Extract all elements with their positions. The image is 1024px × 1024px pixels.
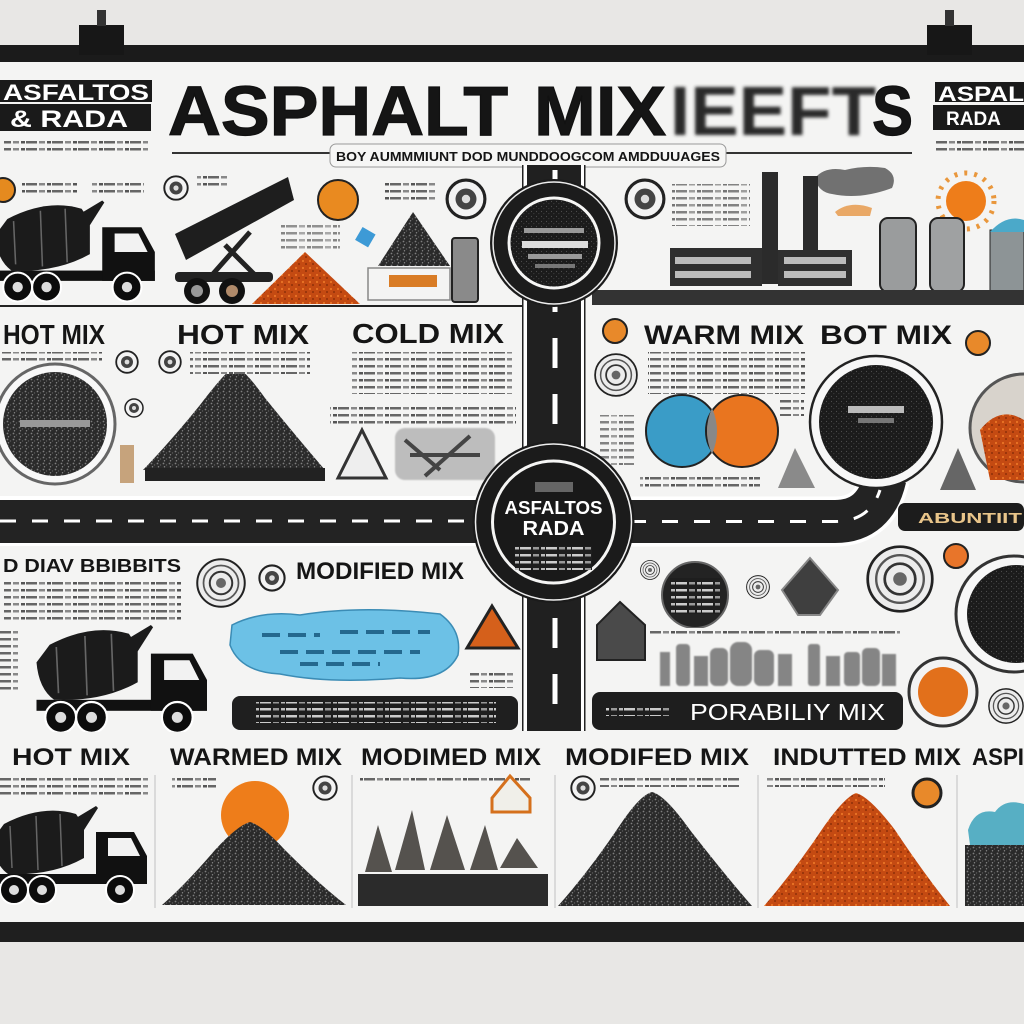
- top scene: factory: [670, 167, 1024, 292]
- orange edge badge: [0, 178, 15, 202]
- small badge: [989, 689, 1023, 723]
- panel: right infographics: [592, 544, 1024, 730]
- central junction: logo: [472, 441, 634, 603]
- logo left: & RADA: [10, 106, 128, 133]
- blue water shape: [230, 610, 459, 680]
- truck: [36, 625, 207, 733]
- plant box: [368, 268, 450, 300]
- orange disc: [706, 395, 778, 467]
- small figure: [120, 445, 134, 483]
- heading: MODIMED MIX: [361, 744, 541, 771]
- heading: INDUTTED MIX: [773, 744, 961, 771]
- disc: [0, 364, 115, 484]
- text block: [4, 580, 182, 620]
- truck: [0, 806, 147, 904]
- logo left: ASFALTOS: [3, 80, 149, 105]
- plant buildings: [670, 248, 852, 286]
- heading: WARMED MIX: [170, 744, 342, 771]
- small icon: [640, 560, 660, 580]
- heading: warm mix: WARM MIX: [644, 320, 804, 350]
- dark pile with sun: [162, 822, 346, 905]
- blue disc: [646, 395, 718, 467]
- small text rows under logos: [4, 139, 1024, 153]
- subtitle: BOY AUMMMIUNT DOD MUNDDOOGCOM AMDDUUAGES: [336, 150, 720, 164]
- logo right: ASPAL: [938, 83, 1024, 106]
- heading: HOT MIX: [12, 744, 130, 771]
- logo right: [933, 82, 1024, 130]
- heading: hot mix: HOT MIX: [3, 319, 105, 350]
- pile base: [145, 468, 325, 481]
- small badges: [116, 351, 181, 417]
- text bar: [232, 696, 518, 730]
- heading: hot mix 2: HOT MIX: [177, 319, 309, 350]
- icon: cement truck: [0, 200, 155, 302]
- label: abuntiit pill: ABUNTIIT: [918, 510, 1022, 527]
- text fragments: [22, 172, 435, 250]
- silos: [880, 218, 1024, 292]
- right machine: [965, 802, 1024, 906]
- sketch icons: [338, 428, 495, 480]
- icon: orange badge right: [966, 331, 990, 355]
- text fragment: [470, 670, 514, 688]
- small figures: [778, 448, 815, 488]
- black disc: [810, 356, 942, 488]
- small ring: [747, 576, 769, 598]
- horizontal road left: [0, 496, 480, 546]
- title word: mix: MIX: [534, 72, 666, 150]
- badge small: [259, 565, 285, 591]
- bottom rail: [0, 922, 1024, 942]
- dark pile: [558, 792, 752, 906]
- text rows: [0, 777, 885, 795]
- panel: daily benefits: [0, 556, 518, 733]
- warning: [467, 606, 518, 648]
- badge: [595, 354, 637, 396]
- text fragments: [600, 400, 804, 488]
- black disc: [662, 562, 728, 628]
- text fragment: [0, 630, 18, 690]
- blue diamond: [355, 227, 376, 247]
- chimneys: [762, 172, 818, 284]
- text fragments: [672, 184, 750, 226]
- top rail and hangers: [0, 10, 1024, 62]
- orange pile: [764, 793, 950, 906]
- central junction: logo: ASFALTOS: [504, 498, 602, 518]
- badge: [197, 559, 245, 607]
- text block: [190, 352, 310, 374]
- diamond: [782, 558, 838, 615]
- figures group: [358, 810, 548, 906]
- text block: [648, 352, 806, 394]
- sun: [221, 781, 289, 849]
- overlap: [707, 408, 717, 454]
- orange medallion: [909, 658, 977, 726]
- heading: D DIAV BBIBBITS: [3, 556, 181, 576]
- panel: warm mix: [595, 319, 1024, 490]
- title word: blurred middle: IEEFT: [670, 72, 876, 150]
- orange pile: [252, 252, 360, 304]
- skyline: [660, 642, 896, 686]
- label: abuntiit pill: [898, 503, 1024, 531]
- panel dividers: [155, 775, 957, 908]
- badge orange: [913, 779, 941, 807]
- heading: MODIFED MIX: [565, 744, 749, 771]
- curved road right: [630, 478, 885, 522]
- ring badge: [868, 547, 932, 611]
- icon: orange house: [492, 776, 530, 812]
- logo right: RADA: [946, 109, 1001, 130]
- tower: [452, 238, 478, 302]
- orange medallion: [318, 180, 358, 220]
- small orange: [944, 544, 968, 568]
- road segment under factory: [592, 290, 1024, 305]
- dark pile: [378, 212, 450, 266]
- icon: tipper trailer: [175, 177, 294, 304]
- top scene: trucks and piles: [0, 172, 664, 304]
- bottom band: [0, 732, 1024, 922]
- icon: house shield: [597, 602, 645, 660]
- pill: porability mix: PORABILIY MIX: [690, 699, 885, 725]
- vertical road: [522, 165, 586, 731]
- title word: final letter: S: [872, 72, 913, 150]
- mix disc at edge: [970, 374, 1024, 482]
- text block: [352, 352, 512, 394]
- text block: [2, 352, 102, 362]
- small figure right: [940, 448, 976, 490]
- subtitle: [172, 144, 912, 167]
- pill: porability mix: [592, 692, 903, 730]
- large dark disc: [956, 556, 1024, 672]
- upper road junction: [490, 179, 618, 307]
- icon: orange badge: [603, 319, 627, 343]
- title word: asphalt: ASPHALT: [168, 72, 508, 150]
- text block: [330, 403, 516, 424]
- small badges: [313, 776, 595, 800]
- orange cloud: [835, 205, 872, 216]
- main title: [168, 72, 913, 150]
- panel: hot / cold mix: [0, 318, 516, 484]
- heading: bot mix: BOT MIX: [820, 320, 952, 350]
- heading: modified mix: MODIFIED MIX: [296, 558, 464, 585]
- logo left: [0, 80, 152, 133]
- smoke: [815, 167, 894, 196]
- central junction: logo: RADA: [522, 518, 584, 540]
- sun: [938, 173, 994, 229]
- road outer edge lines: [0, 305, 526, 307]
- heading: cold mix: COLD MIX: [352, 318, 504, 349]
- dark pile: [143, 366, 325, 470]
- icon badges: [164, 176, 664, 218]
- text row: [650, 628, 900, 638]
